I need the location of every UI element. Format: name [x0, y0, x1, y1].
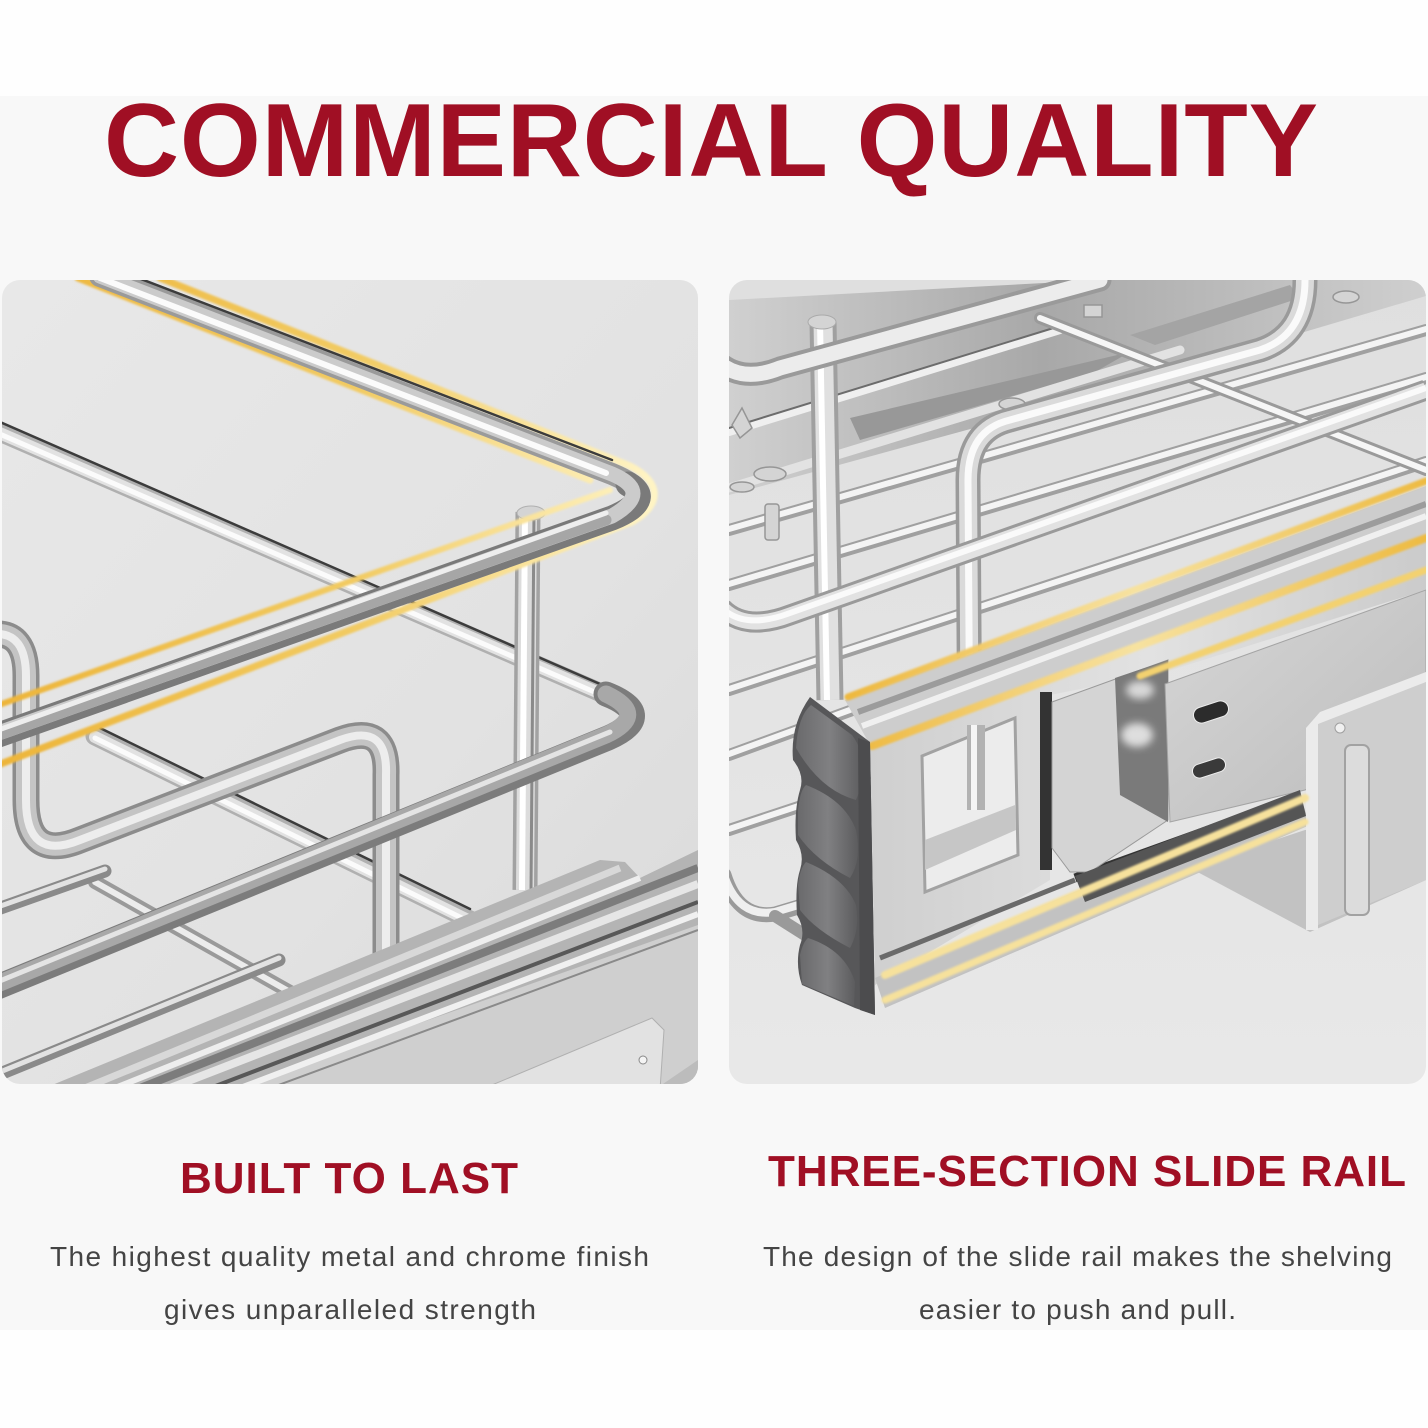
rear loop tube [956, 280, 1318, 654]
shelf sheet metal [729, 280, 1426, 495]
gold highlight lines [848, 481, 1426, 1000]
lower slide channel [1075, 790, 1306, 902]
screws and fixings [730, 291, 1359, 540]
text block: built to last description [50, 1241, 649, 1325]
text block: slide rail description: The design of the slide rail makes the shelving [763, 1241, 1392, 1272]
text block: slide rail description: easier to push and pull. [919, 1294, 1236, 1325]
heading: three-section slide rail: THREE-SECTION SLIDE RAIL [768, 1147, 1406, 1196]
outer rail section [845, 486, 1426, 1008]
upper tube [722, 280, 1100, 374]
rubber end cap [793, 697, 875, 1015]
slide rail [40, 850, 698, 1090]
bracket underside [1199, 830, 1426, 932]
lower left tube [724, 875, 805, 935]
back wire rail [0, 422, 606, 992]
heading: built to last: BUILT TO LAST [180, 1154, 518, 1203]
title: COMMERCIAL QUALITY [104, 83, 1318, 199]
panel: slide rail photo [722, 280, 1426, 1084]
top frame wire with gold highlight [0, 274, 654, 768]
centre rail section [1040, 660, 1168, 872]
panel: built to last photo [0, 274, 698, 1090]
short wire rods [0, 869, 279, 1076]
lower frame wire [0, 694, 632, 990]
rail window cutout [922, 718, 1018, 892]
vertical post [517, 506, 545, 890]
handle loop [0, 634, 386, 960]
background wires [729, 318, 1426, 830]
text block: built to last description: The highest quality metal and chrome finish [50, 1241, 649, 1272]
end bracket [1306, 672, 1426, 930]
vertical posts [808, 315, 836, 700]
inner mounting plate [1165, 590, 1426, 822]
text block: slide rail description [763, 1241, 1392, 1325]
long front tube [722, 388, 1426, 622]
text block: built to last description: gives unparalleled strength [164, 1294, 536, 1325]
